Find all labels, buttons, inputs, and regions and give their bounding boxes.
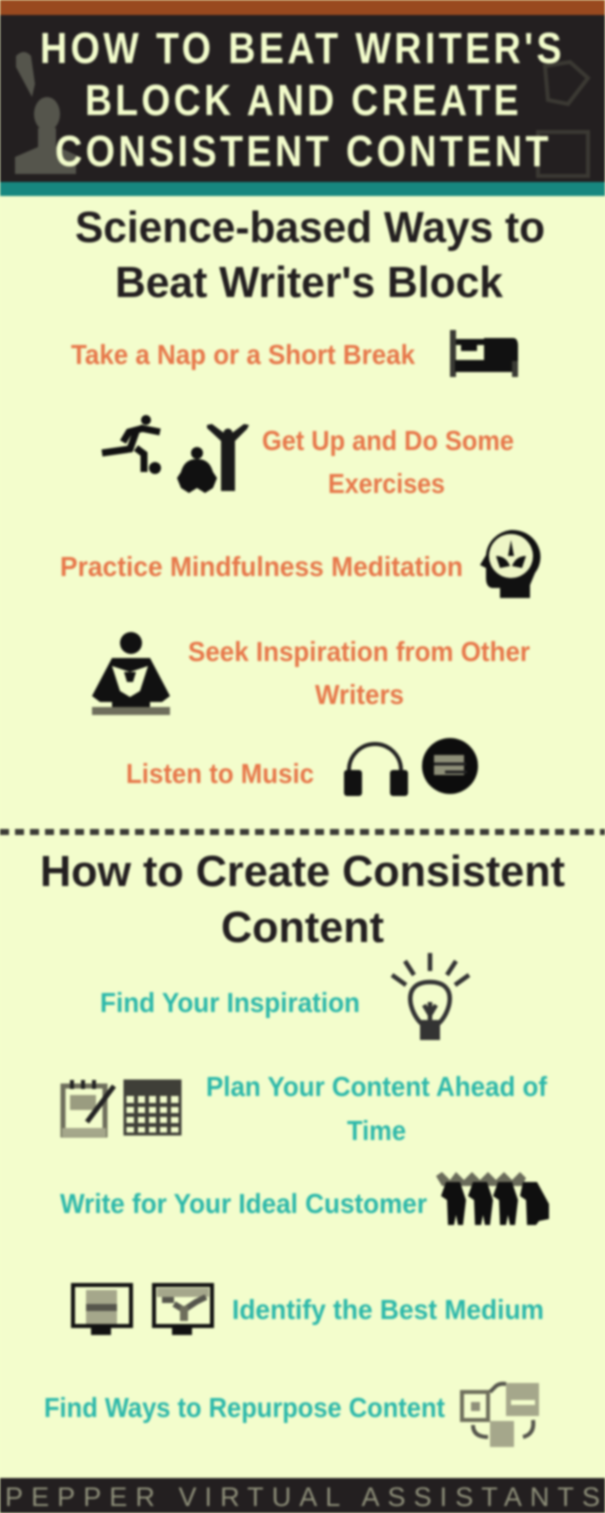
icon: stretching person bbox=[207, 424, 249, 491]
icon: calendar bbox=[125, 1081, 180, 1134]
icon: monitor with chart bbox=[154, 1285, 212, 1335]
icon: spotify logo bbox=[422, 738, 478, 794]
icon: runner with ball bbox=[102, 415, 161, 474]
footer: PEPPER VIRTUAL ASSISTANTS bbox=[5, 1482, 600, 1512]
item: get up and exercise: Exercises bbox=[328, 468, 445, 499]
item: get up and exercise: Get Up and Do Some bbox=[262, 425, 514, 456]
header banner bbox=[0, 0, 605, 196]
item: plan content: Time bbox=[347, 1115, 406, 1146]
heading: science-based ways bbox=[75, 203, 545, 307]
item: best medium: Identify the Best Medium bbox=[232, 1294, 544, 1325]
heading: science-based ways: Beat Writer's Block bbox=[115, 258, 504, 307]
item: take a nap: Take a Nap or a Short Break bbox=[71, 339, 415, 370]
item: mindfulness meditation: Practice Mindfulness Meditation bbox=[60, 551, 463, 582]
item: seek inspiration: Writers bbox=[315, 679, 404, 710]
title: BLOCK AND CREATE bbox=[85, 76, 522, 125]
title bbox=[40, 24, 565, 176]
icon: person reading bbox=[92, 632, 170, 715]
icon: notepad and pencil bbox=[62, 1080, 114, 1137]
heading: science-based ways: Science-based Ways to bbox=[75, 203, 545, 252]
item: plan content: Plan Your Content Ahead of bbox=[206, 1071, 548, 1102]
icon: meditating person bbox=[177, 447, 217, 493]
divider bbox=[0, 829, 605, 835]
icon: head with lotus bbox=[480, 530, 540, 598]
item: plan content bbox=[206, 1071, 548, 1146]
item: get up and exercise bbox=[262, 425, 514, 499]
item: repurpose content: Find Ways to Repurpose Content bbox=[44, 1392, 445, 1423]
heading: consistent content bbox=[40, 847, 565, 952]
item: ideal customer: Write for Your Ideal Customer bbox=[60, 1188, 427, 1219]
icon: bed bbox=[450, 330, 518, 377]
item: find inspiration: Find Your Inspiration bbox=[100, 987, 360, 1018]
icon: monitor with document bbox=[73, 1285, 131, 1335]
icon: headphones bbox=[344, 744, 408, 796]
item: listen to music: Listen to Music bbox=[126, 758, 314, 789]
icon: ghost laptop bbox=[538, 62, 588, 176]
heading: consistent content: Content bbox=[221, 903, 384, 952]
icon: repurpose cycle bbox=[462, 1383, 539, 1447]
icon: light bulb bbox=[392, 953, 469, 1040]
icon: group of customers bbox=[436, 1172, 549, 1225]
item: seek inspiration: Seek Inspiration from Other bbox=[188, 636, 530, 667]
item: seek inspiration bbox=[188, 636, 530, 710]
heading: consistent content: How to Create Consistent bbox=[40, 847, 565, 896]
icon: ghost person bbox=[15, 52, 76, 174]
